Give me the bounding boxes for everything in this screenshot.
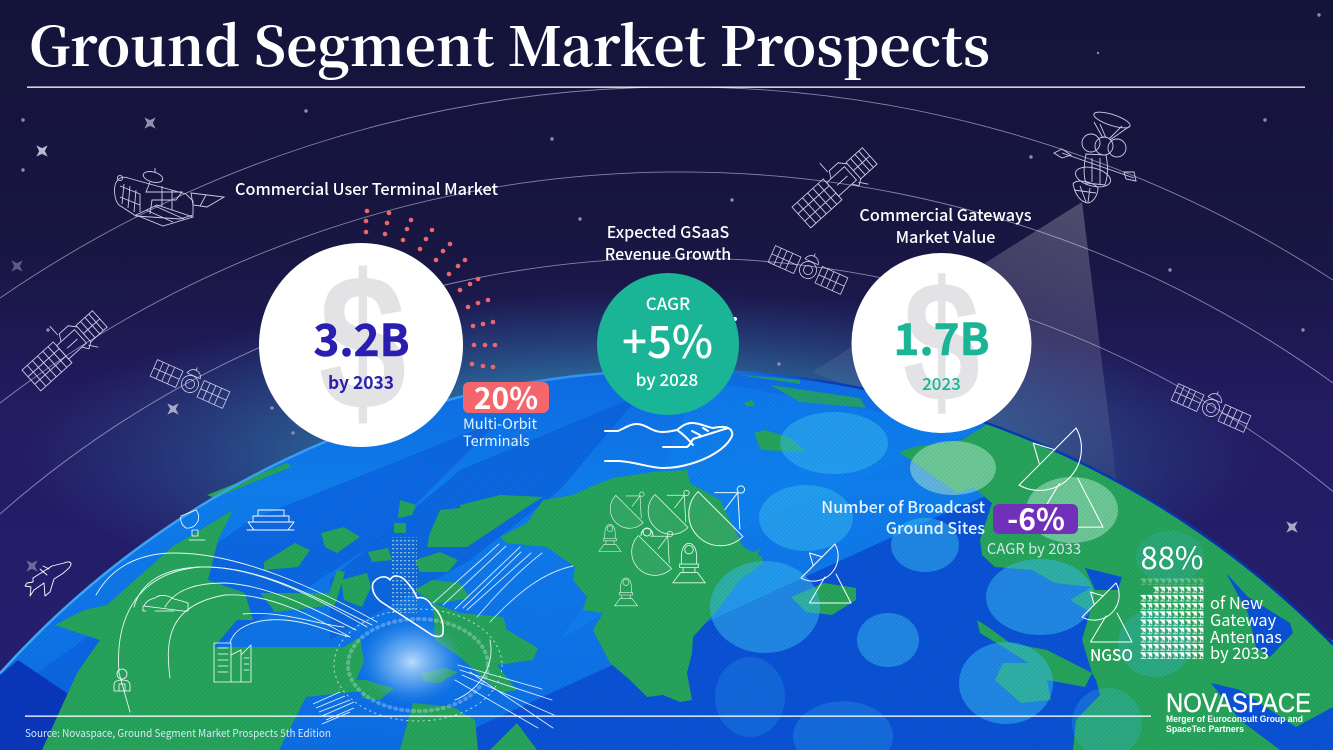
heading: Expected GSaaS bbox=[607, 219, 730, 243]
NGSO label: NGSO bbox=[1090, 642, 1133, 666]
pedestal four bbox=[673, 543, 705, 583]
satellite: left panel bbox=[13, 298, 113, 395]
dish one bbox=[610, 492, 644, 528]
caption: of New bbox=[1210, 590, 1263, 614]
dish two bbox=[648, 490, 689, 534]
dish four bbox=[632, 531, 673, 575]
satellite: capsule bbox=[1054, 109, 1136, 203]
heading line 2: Revenue Growth bbox=[605, 241, 731, 265]
badge value: -6% bbox=[1007, 495, 1065, 539]
stars bbox=[6, 13, 1321, 577]
pedestal two bbox=[641, 528, 653, 536]
value circle bbox=[259, 243, 463, 447]
dish three bbox=[689, 486, 745, 546]
badge bbox=[463, 382, 549, 413]
year: by 2028 bbox=[636, 366, 698, 391]
wordmark: NOVASPACE bbox=[1166, 688, 1311, 718]
value: 1.7B bbox=[894, 304, 990, 368]
antenna grid: full rows bbox=[1140, 594, 1204, 660]
inland water bbox=[1085, 568, 1333, 750]
icon: data fan bbox=[313, 692, 354, 724]
title: Ground Segment Market Prospects bbox=[29, 5, 990, 82]
tagline: Merger of Euroconsult Group and bbox=[1166, 714, 1303, 724]
logo: Novaspace bbox=[1166, 688, 1311, 734]
icon: car bbox=[143, 595, 188, 611]
year: 2023 bbox=[922, 370, 961, 395]
callout: broadcast ground sites bbox=[821, 494, 1081, 559]
panel: gateways market value bbox=[852, 202, 1032, 438]
icons: gateway dishes bbox=[599, 486, 745, 606]
caption: Antennas bbox=[1210, 624, 1282, 648]
satellite: telescope bbox=[115, 168, 224, 226]
callout: multi-orbit terminals bbox=[463, 374, 549, 451]
share value: 88% bbox=[1141, 533, 1203, 578]
continents bbox=[42, 374, 1333, 750]
caption: CAGR by 2033 bbox=[987, 538, 1081, 559]
dollar sign: $ bbox=[319, 235, 406, 451]
orbit lines bbox=[0, 87, 1333, 514]
italy-like peninsula bbox=[977, 620, 1092, 703]
coverage spots over land bbox=[910, 441, 1118, 543]
pedestal one bbox=[599, 524, 621, 551]
satellite: right bbox=[1171, 375, 1254, 432]
heading line 2: Market Value bbox=[896, 224, 995, 248]
caption: Gateway bbox=[1210, 607, 1277, 631]
satellite: centre bbox=[768, 237, 851, 294]
heading: Commercial User Terminal Market bbox=[235, 176, 499, 200]
pink dot arc bbox=[364, 209, 497, 369]
panel: NGSO gateway share bbox=[1090, 533, 1282, 666]
panel: user terminal market bbox=[235, 176, 499, 451]
icon: buildings bbox=[214, 643, 251, 682]
icon: NGSO dish bbox=[1082, 583, 1132, 642]
caption: Multi-Orbit bbox=[463, 413, 538, 434]
caption: by 2033 bbox=[1210, 640, 1269, 664]
label line 2: Ground Sites bbox=[886, 515, 985, 539]
data column bbox=[392, 537, 417, 613]
badge value: 20% bbox=[474, 374, 538, 418]
deep ocean bands bbox=[0, 380, 1333, 750]
right continent bbox=[899, 424, 1333, 750]
caption line 2: Terminals bbox=[463, 430, 530, 451]
header rule bbox=[27, 86, 1305, 88]
label: Number of Broadcast bbox=[821, 494, 986, 518]
satellite: lower left bbox=[150, 351, 233, 408]
satellite: centre top bbox=[783, 135, 883, 232]
icon: hand bbox=[605, 423, 732, 468]
value circle bbox=[852, 253, 1032, 433]
terminal network links bbox=[96, 544, 573, 728]
icon: broadcast dish small bbox=[801, 544, 851, 603]
source note: Source: Novaspace, Ground Segment Market Prospects 5th Edition bbox=[25, 726, 331, 741]
icon: plane bbox=[25, 562, 71, 596]
earth bbox=[0, 370, 1333, 750]
CAGR label: CAGR bbox=[646, 290, 690, 315]
antenna grid: faded bbox=[1140, 578, 1204, 586]
badge bbox=[993, 504, 1078, 534]
icon: cloud bbox=[372, 576, 443, 637]
heading: Commercial Gateways bbox=[859, 202, 1032, 226]
antenna grid: partial row bbox=[1153, 586, 1204, 594]
value caption: by 2033 bbox=[328, 369, 394, 395]
icon: person bbox=[114, 669, 130, 691]
icon: broadcast dish large bbox=[1019, 428, 1103, 527]
value: 3.2B bbox=[314, 305, 410, 369]
icon: small antenna bbox=[181, 510, 205, 540]
tagline line 2: SpaceTec Partners bbox=[1166, 724, 1244, 734]
icon: ship bbox=[247, 510, 294, 530]
panel: GSaaS growth bbox=[597, 219, 739, 415]
signal beam from satellite bbox=[812, 202, 1118, 492]
growth value: +5% bbox=[622, 306, 713, 371]
network hub glow bbox=[360, 620, 464, 704]
footer rule bbox=[25, 716, 1151, 717]
coverage spots bbox=[710, 412, 1204, 750]
dollar sign: $ bbox=[903, 246, 980, 438]
pedestal three bbox=[615, 578, 637, 606]
growth circle bbox=[597, 273, 739, 415]
